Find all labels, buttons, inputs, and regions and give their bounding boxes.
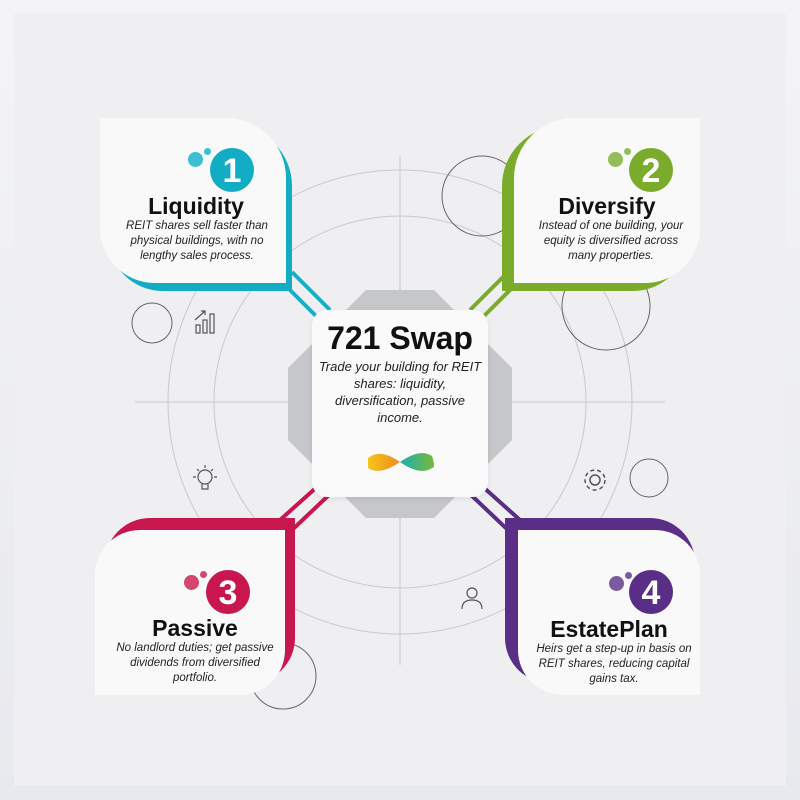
panel: 2 Diversify: 2 <box>642 152 660 190</box>
center text: Trade your building for REIT shares: liquidity, diversification, passive income. <box>319 359 481 425</box>
panel: 1 Liquidity <box>100 118 292 291</box>
icon: number 3 <box>184 570 250 614</box>
octagon <box>288 290 512 518</box>
icon: bulb <box>193 465 217 490</box>
icon: gear <box>584 469 606 491</box>
text: No landlord duties; get passive dividends from diversified portfolio. <box>116 642 274 684</box>
panel: center 721 Swap <box>312 310 488 497</box>
connectors <box>280 272 520 530</box>
heading: Diversify <box>558 193 656 219</box>
heading: Passive <box>152 615 238 641</box>
icon: number 1 <box>188 148 254 192</box>
panel: 3 Passive <box>95 518 295 695</box>
text: REIT shares sell faster than physical buildings, with no lengthy sales process. <box>126 220 268 262</box>
center heading: 721 Swap <box>327 320 473 356</box>
heading: EstatePlan <box>550 616 668 642</box>
icon: number 4 <box>609 570 673 614</box>
panel: 1 Liquidity: 1 <box>223 152 241 190</box>
panel: 4 EstatePlan: 4 <box>642 574 660 612</box>
icon: number 2 <box>608 148 673 192</box>
icon: person <box>461 587 483 609</box>
panel: 2 Diversify <box>502 118 700 291</box>
heading: Liquidity <box>148 193 244 219</box>
icon: infinity logo <box>368 453 434 471</box>
text: Heirs get a step-up in basis on REIT shares, reducing capital gains tax. <box>536 643 692 685</box>
panel: 3 Passive: 3 <box>219 574 237 612</box>
panel: 4 EstatePlan <box>505 518 700 695</box>
icon: chart <box>194 310 215 334</box>
text: Instead of one building, your equity is diversified across many properties. <box>539 220 683 262</box>
